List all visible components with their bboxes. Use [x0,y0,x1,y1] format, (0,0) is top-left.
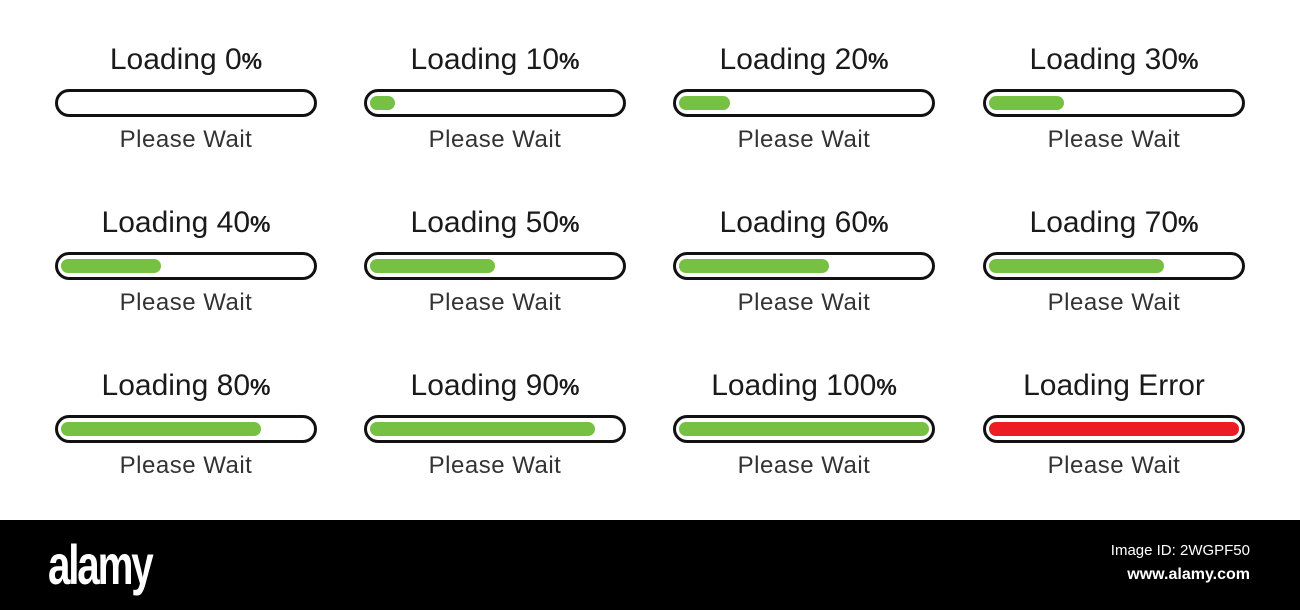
panel: loading 30 [983,43,1245,153]
panel: loading 50 [364,206,626,316]
panel: loading error: Please Wait [1048,452,1180,479]
panel: loading 70: Please Wait [1048,289,1180,316]
panel: loading 80 [55,369,317,479]
panel: loading 100: Loading 100% [711,369,897,402]
image id: Image ID: 2WGPF50 [1111,542,1250,559]
panel: loading 10: Please Wait [429,126,561,153]
panel: loading 30: Please Wait [1048,126,1180,153]
panel: loading 70 [983,206,1245,316]
logo: alamy [48,533,152,596]
panel: loading 40: Loading 40% [102,206,270,239]
panel: loading 0 [55,43,317,153]
panel: loading 80: Loading 80% [102,369,270,402]
panel: loading 20: Loading 20% [720,43,888,76]
panel: loading 50: Loading 50% [411,206,579,239]
footer [0,520,1300,610]
panel: loading 90: Please Wait [429,452,561,479]
panel: loading 0: Loading 0% [110,43,262,76]
panel: loading 60 [673,206,935,316]
panel: loading 10 [364,43,626,153]
panel: loading 80: Please Wait [120,452,252,479]
panel: loading 90 [364,369,626,479]
panel: loading 60: Loading 60% [720,206,888,239]
panel: loading 100: Please Wait [738,452,870,479]
panel: loading 20: Please Wait [738,126,870,153]
panel: loading 60: Please Wait [738,289,870,316]
panel: loading 70: Loading 70% [1030,206,1198,239]
panel: loading 30: Loading 30% [1030,43,1198,76]
panel: loading 40: Please Wait [120,289,252,316]
panel: loading 10: Loading 10% [411,43,579,76]
panel: loading error: Loading Error [1023,369,1205,402]
panel: loading 40 [55,206,317,316]
panel: loading 50: Please Wait [429,289,561,316]
panel: loading 20 [673,43,935,153]
panel: loading 100 [673,369,935,479]
panel: loading error [983,369,1245,479]
url: www.alamy.com [1127,566,1250,583]
panel: loading 0: Please Wait [120,126,252,153]
panel: loading 90: Loading 90% [411,369,579,402]
